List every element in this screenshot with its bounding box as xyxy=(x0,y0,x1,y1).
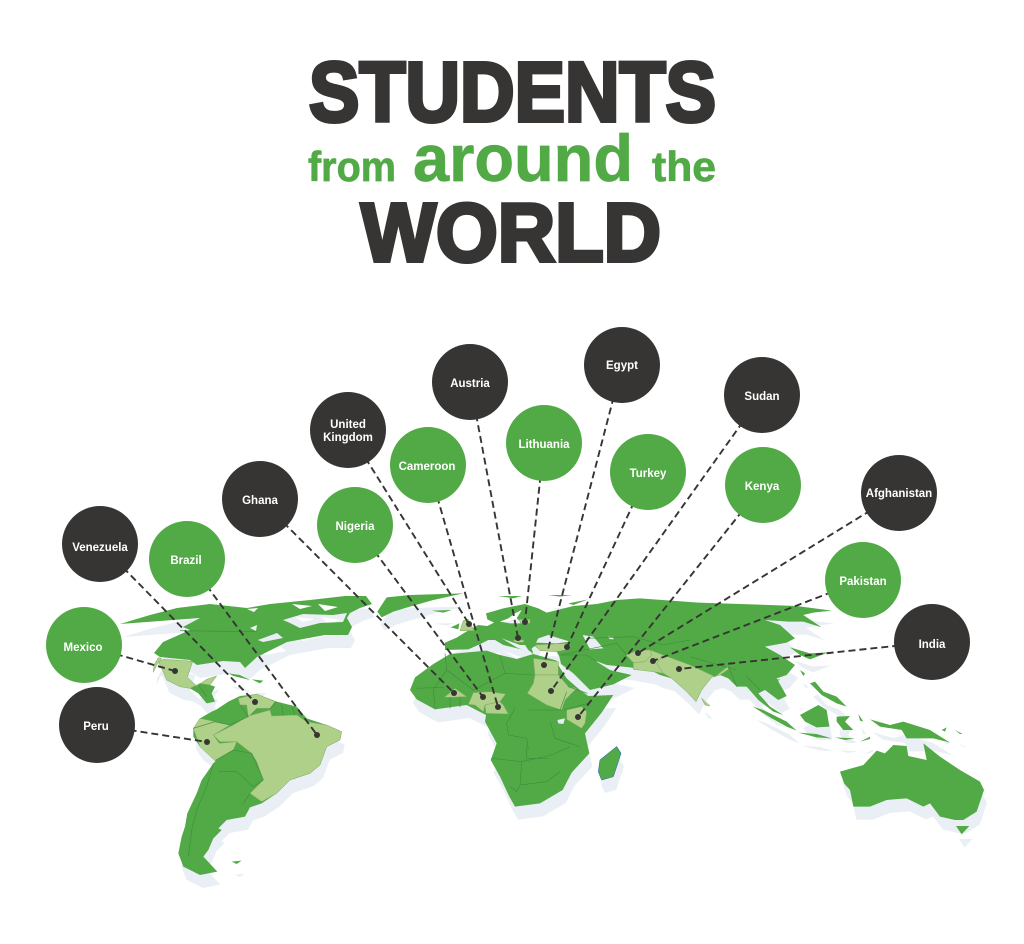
bubble: Brazil xyxy=(149,521,225,597)
bubble: Turkey xyxy=(610,434,686,510)
dashed connector lines xyxy=(84,365,932,742)
title word: from: from xyxy=(308,143,396,190)
bubble: United Kingdom: Kingdom xyxy=(323,432,373,444)
bubble: Egypt xyxy=(584,327,660,403)
highlighted countries xyxy=(153,619,728,802)
title word: the: the xyxy=(652,143,716,190)
bubble: Turkey: Turkey xyxy=(630,468,667,480)
bubble: India: India xyxy=(919,639,946,651)
title word: around: around xyxy=(413,121,633,195)
bubble: Nigeria: Nigeria xyxy=(336,521,375,533)
bubble: Nigeria xyxy=(317,487,393,563)
bubble: Ghana: Ghana xyxy=(242,495,278,507)
title xyxy=(308,45,716,279)
title line: WORLD: WORLD xyxy=(361,186,661,279)
title line: STUDENTS: STUDENTS xyxy=(309,45,716,139)
bubble: Mexico: Mexico xyxy=(64,642,102,654)
bubble: Austria: Austria xyxy=(450,378,490,390)
bubble: India xyxy=(894,604,970,680)
country: UK, Ghana, Nigeria, Cameroon, Egypt, Sudan, Kenya, Turkey, Afghanistan, Pakistan, India xyxy=(444,619,728,728)
bubble: Mexico xyxy=(46,607,122,683)
bubble: Peru xyxy=(59,687,135,763)
bubble: United Kingdom xyxy=(310,392,386,468)
bubble: Peru: Peru xyxy=(83,721,109,733)
bubble: Austria xyxy=(432,344,508,420)
bubble: Ghana xyxy=(222,461,298,537)
bubble: Egypt: Egypt xyxy=(606,360,638,372)
bubble: Pakistan xyxy=(825,542,901,618)
country: Mexico, Peru, Venezuela, Brazil xyxy=(153,658,342,802)
location dots xyxy=(172,619,682,745)
bubble: Cameroon xyxy=(390,427,466,503)
bubble: Lithuania: Lithuania xyxy=(518,439,570,451)
madagascar outline xyxy=(598,747,621,780)
bubble: Venezuela xyxy=(62,506,138,582)
map shadow xyxy=(123,606,987,888)
bubble: Afghanistan: Afghanistan xyxy=(866,488,932,500)
world map landmass xyxy=(120,593,984,875)
bubble: Cameroon: Cameroon xyxy=(399,461,455,473)
bubble: Sudan: Sudan xyxy=(744,391,780,403)
bubble: Sudan xyxy=(724,357,800,433)
bubble: Venezuela: Venezuela xyxy=(72,542,128,554)
bubble: Kenya: Kenya xyxy=(745,481,780,493)
bubble: Pakistan: Pakistan xyxy=(839,576,887,588)
bubble: Kenya xyxy=(725,447,801,523)
bubble: Lithuania xyxy=(506,405,582,481)
bubble: Brazil: Brazil xyxy=(170,555,202,567)
bubble: Afghanistan xyxy=(861,455,937,531)
country borders xyxy=(180,631,760,857)
bubble: United Kingdom: United xyxy=(330,419,366,431)
